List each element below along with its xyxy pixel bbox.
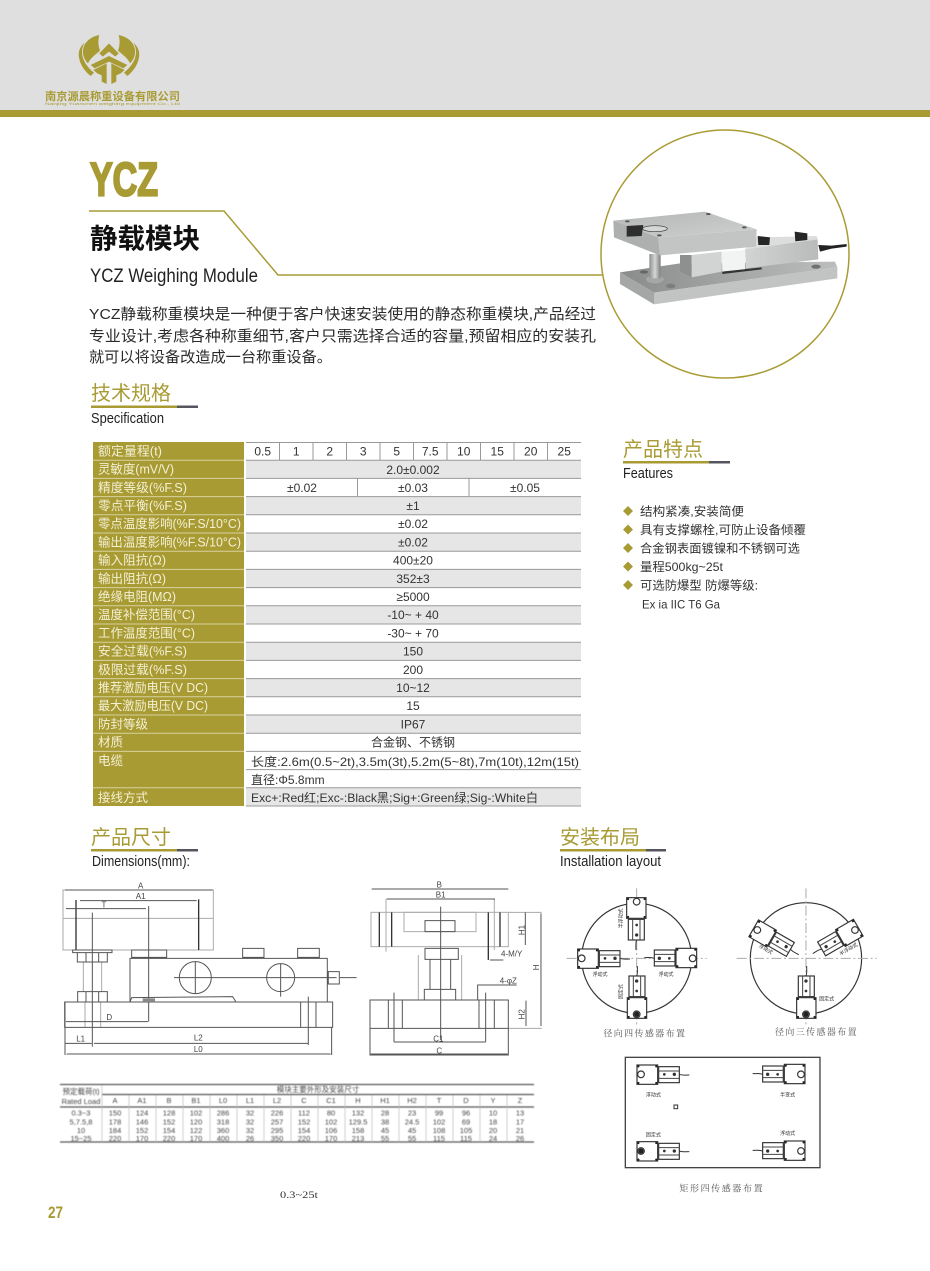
features list: 合金钢表面镀镍和不锈钢可选 bbox=[640, 540, 800, 556]
sensor labels: 半变式 bbox=[780, 1092, 795, 1099]
table values: 220 bbox=[163, 1134, 175, 1143]
table data values: IP67 bbox=[401, 717, 426, 731]
heading: dimensions bbox=[91, 826, 198, 870]
table label column: 绝缘电阻(MΩ) bbox=[98, 589, 176, 604]
table values: 17 bbox=[516, 1118, 524, 1126]
table values: 360 bbox=[217, 1126, 229, 1135]
heading: features: 产品特点 bbox=[623, 438, 703, 461]
intro text: YCZ静载称重模块是一种便于客户快速安装使用的静态称重模块,产品经过 bbox=[89, 306, 596, 323]
layout: radial four sensors bbox=[567, 888, 707, 1039]
table values: 69 bbox=[462, 1118, 470, 1126]
table data values: ±0.02 bbox=[287, 481, 317, 495]
table label column: 材质 bbox=[98, 736, 123, 750]
table values: 102 bbox=[325, 1118, 337, 1126]
table values: T bbox=[437, 1096, 442, 1105]
dimension labels: C bbox=[436, 1046, 442, 1055]
table values: 154 bbox=[298, 1126, 310, 1135]
table values: 122 bbox=[190, 1126, 202, 1135]
dimension labels: D bbox=[106, 1013, 112, 1022]
features list: 结构紧凑,安装简便 bbox=[640, 504, 744, 518]
table values: 102 bbox=[433, 1118, 445, 1126]
dimension labels: H1 bbox=[518, 924, 527, 935]
dimension labels: 4-φZ bbox=[500, 976, 517, 985]
table values: 178 bbox=[109, 1118, 121, 1126]
table data values: 15 bbox=[406, 699, 420, 713]
heading: features: Features bbox=[623, 465, 673, 482]
table values: 55 bbox=[381, 1134, 389, 1143]
heading: installation layout: 安装布局 bbox=[560, 826, 640, 849]
table values: 295 bbox=[271, 1126, 283, 1135]
product photo in circle bbox=[601, 130, 849, 378]
table values: 45 bbox=[381, 1126, 389, 1135]
table values: B1 bbox=[191, 1096, 201, 1105]
heading: features bbox=[623, 438, 730, 482]
sensor labels bbox=[758, 941, 859, 1003]
dimension drawing: end view bbox=[340, 880, 542, 1055]
table data values: -30~ + 70 bbox=[387, 626, 439, 640]
table values: 286 bbox=[217, 1108, 229, 1118]
table values: 132 bbox=[352, 1108, 364, 1118]
sensor labels: 浮动式 bbox=[758, 943, 774, 956]
table data values: 长度:2.6m(0.5~2t),3.5m(3t),5.2m(5~8t),7m(10t),12m(15t) bbox=[251, 754, 579, 769]
table values: 106 bbox=[325, 1126, 337, 1135]
table data values: ±0.03 bbox=[398, 481, 428, 495]
table values: 213 bbox=[352, 1134, 364, 1143]
caption: 矩形四传感器布置 bbox=[679, 1183, 763, 1194]
table values: 10 bbox=[489, 1108, 497, 1118]
table data values: -10~ + 40 bbox=[387, 608, 439, 622]
sensor labels: 浮动式 bbox=[659, 971, 673, 978]
table data values: ±0.02 bbox=[398, 517, 428, 531]
heading: specification bbox=[91, 382, 198, 427]
table data values: 7.5 bbox=[422, 444, 439, 458]
features list bbox=[623, 504, 806, 612]
table values: B bbox=[166, 1096, 172, 1105]
table label column: 额定量程(t) bbox=[98, 444, 162, 458]
features list: 量程500kg~25t bbox=[640, 559, 724, 574]
table values: 220 bbox=[109, 1134, 121, 1143]
dimension labels: A1 bbox=[136, 892, 146, 901]
range note: 0.3~25t bbox=[280, 1191, 318, 1201]
table values: 28 bbox=[381, 1108, 389, 1118]
table values: 220 bbox=[298, 1134, 310, 1143]
table data values: 200 bbox=[403, 663, 423, 677]
dimension labels: C1 bbox=[433, 1035, 444, 1044]
table label column: 输出阻抗(Ω) bbox=[98, 571, 166, 586]
intro text: 专业设计,考虑各种称重细节,客户只需选择合适的容量,预留相应的安装孔 bbox=[89, 327, 596, 345]
table values: 150 bbox=[109, 1108, 121, 1118]
table label column: 接线方式 bbox=[98, 790, 149, 805]
table values: 152 bbox=[136, 1126, 148, 1135]
dimension labels bbox=[76, 881, 203, 1054]
table values: 129.5 bbox=[349, 1118, 367, 1126]
table values: 152 bbox=[298, 1118, 310, 1126]
table values: 99 bbox=[435, 1108, 443, 1118]
table values: Z bbox=[518, 1096, 523, 1105]
features list: 可选防爆型 防爆等级: bbox=[640, 578, 758, 592]
table data values: 2.0±0.002 bbox=[386, 463, 440, 477]
table values: L1 bbox=[246, 1096, 254, 1105]
dimension labels: H bbox=[532, 964, 541, 970]
bullet diamonds bbox=[623, 506, 633, 590]
heading: dimensions: 产品尺寸 bbox=[91, 826, 171, 849]
table values: 45 bbox=[408, 1126, 416, 1135]
table label column: 工作温度范围(°C) bbox=[98, 625, 195, 640]
dimension labels: L1 bbox=[76, 1035, 86, 1044]
table values: 21 bbox=[516, 1126, 524, 1135]
table values: 124 bbox=[136, 1108, 148, 1118]
sensor labels bbox=[646, 1092, 795, 1139]
table data values: ≥5000 bbox=[396, 590, 430, 604]
table label column: 输入阻抗(Ω) bbox=[98, 553, 166, 568]
table values: 112 bbox=[298, 1108, 310, 1118]
table values: 15~25 bbox=[70, 1134, 92, 1143]
table values: L0 bbox=[219, 1096, 227, 1105]
table data values: 10 bbox=[457, 444, 471, 458]
table data values bbox=[251, 444, 579, 805]
table label column: 精度等级(%F.S) bbox=[98, 480, 187, 495]
dimension labels: 4-M/Y bbox=[501, 950, 523, 959]
dimensions table bbox=[60, 1084, 534, 1143]
dimension labels bbox=[433, 880, 541, 1055]
sensor labels: 浮动式 bbox=[780, 1130, 795, 1137]
table data values: 5 bbox=[393, 444, 400, 458]
caption: 径向三传感器布置 bbox=[775, 1026, 857, 1037]
table values: 257 bbox=[271, 1118, 283, 1126]
table label column: 最大激励电压(V DC) bbox=[98, 699, 208, 713]
table label column: 零点温度影响(%F.S/10°C) bbox=[98, 516, 241, 531]
heading: dimensions: Dimensions(mm): bbox=[92, 853, 190, 870]
table values: H1 bbox=[380, 1096, 390, 1105]
intro text: 就可以将设备改造成一台称重设备。 bbox=[89, 349, 332, 366]
table values: H2 bbox=[407, 1096, 417, 1105]
table values: 158 bbox=[352, 1126, 364, 1135]
table data values: 400±20 bbox=[393, 554, 433, 568]
table values: 400 bbox=[217, 1134, 229, 1143]
header band bbox=[0, 0, 930, 117]
table data values: 2 bbox=[326, 444, 333, 458]
table values: 318 bbox=[217, 1118, 229, 1126]
heading: english: YCZ Weighing Module bbox=[90, 266, 258, 287]
table data values: 10~12 bbox=[396, 681, 430, 695]
logo mark bbox=[79, 35, 139, 84]
table label column: 电缆 bbox=[98, 754, 124, 768]
table values: H bbox=[355, 1096, 361, 1105]
table label column: 零点平衡(%F.S) bbox=[98, 499, 187, 513]
table values: 10 bbox=[77, 1126, 85, 1135]
table values: 55 bbox=[408, 1134, 416, 1143]
table values: 105 bbox=[460, 1126, 472, 1135]
table values: 102 bbox=[190, 1108, 202, 1118]
table values: 120 bbox=[190, 1118, 202, 1126]
table values: 32 bbox=[246, 1126, 254, 1135]
table values: 26 bbox=[516, 1134, 524, 1143]
dimension labels: L0 bbox=[194, 1045, 203, 1054]
table data values: 3 bbox=[360, 444, 367, 458]
dimension labels: T bbox=[102, 900, 107, 909]
table label column: 输出温度影响(%F.S/10°C) bbox=[98, 534, 241, 549]
table values: 170 bbox=[136, 1134, 148, 1143]
table values: 152 bbox=[163, 1118, 175, 1126]
table values: 184 bbox=[109, 1126, 121, 1135]
sensor labels: 固定式 bbox=[819, 996, 834, 1003]
table label column: 防封等级 bbox=[98, 716, 149, 731]
table values: 108 bbox=[433, 1126, 445, 1135]
table values: 96 bbox=[462, 1108, 470, 1118]
table values: A1 bbox=[137, 1096, 147, 1105]
table values: C bbox=[301, 1096, 307, 1105]
title: YCZ: YCZ bbox=[90, 152, 158, 206]
table values: 18 bbox=[489, 1118, 497, 1126]
table values: 80 bbox=[327, 1108, 335, 1118]
table values: 226 bbox=[271, 1108, 283, 1118]
layout: radial three sensors bbox=[737, 888, 877, 1037]
table values: 5,7.5,8 bbox=[70, 1118, 92, 1126]
heading: chinese: 静载模块 bbox=[90, 223, 200, 254]
table values: 预定载荷(t) bbox=[62, 1086, 100, 1096]
dimension labels: L2 bbox=[194, 1034, 203, 1043]
table values: L2 bbox=[273, 1096, 281, 1105]
dimension labels: B1 bbox=[436, 890, 446, 899]
table data values: 15 bbox=[491, 444, 504, 458]
product module bbox=[613, 212, 847, 304]
table values: 模块主要外形及安装尺寸 bbox=[277, 1084, 360, 1094]
table label column: 推荐激励电压(V DC) bbox=[98, 681, 208, 695]
table data values: ±1 bbox=[406, 499, 420, 513]
table label column bbox=[93, 442, 244, 806]
table values: 350 bbox=[271, 1134, 283, 1143]
table values: 0.3~3 bbox=[72, 1108, 90, 1118]
table values bbox=[62, 1084, 524, 1143]
logo bbox=[45, 35, 180, 106]
table data rows background bbox=[246, 460, 581, 806]
table values: 128 bbox=[163, 1108, 175, 1118]
table values: 115 bbox=[460, 1134, 472, 1143]
table data values: Exc+:Red红;Exc-:Black黑;Sig+:Green绿;Sig-:White白 bbox=[251, 790, 538, 805]
table data values: 352±3 bbox=[396, 572, 430, 586]
sensor labels: 浮动式 bbox=[646, 1092, 661, 1099]
table values: 154 bbox=[163, 1126, 175, 1135]
company name: 南京源晨称重设备有限公司 bbox=[45, 89, 180, 103]
table data values: 1 bbox=[293, 444, 300, 458]
table data values: 0.5 bbox=[254, 444, 271, 458]
table values: 170 bbox=[190, 1134, 202, 1143]
table values: 38 bbox=[381, 1118, 389, 1126]
table values: 115 bbox=[433, 1134, 445, 1143]
heading: installation layout bbox=[560, 826, 666, 870]
company name english: Nanjing Yuanchen weighing equipment Co., Ltd bbox=[45, 101, 180, 106]
table label column: 温度补偿范围(°C) bbox=[98, 607, 195, 622]
table label column: 灵敏度(mV/V) bbox=[98, 462, 174, 476]
spec table bbox=[93, 442, 581, 806]
table data values: ±0.05 bbox=[510, 481, 540, 495]
sensor labels: 半浮动式 bbox=[838, 941, 859, 957]
features list: 具有支撑螺栓,可防止设备倾覆 bbox=[640, 522, 806, 537]
table values: D bbox=[463, 1096, 469, 1105]
dimension labels: B bbox=[437, 880, 442, 889]
sensor labels: 浮动式 bbox=[593, 971, 607, 978]
table values: 26 bbox=[246, 1134, 254, 1143]
table values: 23 bbox=[408, 1108, 416, 1118]
dimension labels: A bbox=[138, 881, 144, 890]
features list: Ex ia IIC T6 Ga bbox=[642, 598, 720, 612]
sensor labels: 固定式 bbox=[646, 1132, 661, 1139]
table values: A bbox=[112, 1096, 118, 1105]
layout: rectangular four sensors bbox=[625, 1057, 820, 1194]
table values: C1 bbox=[326, 1096, 336, 1105]
table values: Y bbox=[490, 1096, 496, 1105]
table data values: 合金钢、不锈钢 bbox=[371, 735, 455, 750]
sensor labels: 半浮动式 bbox=[617, 908, 624, 928]
table values: 20 bbox=[489, 1126, 497, 1135]
table label column: 极限过载(%F.S) bbox=[98, 663, 187, 677]
sensor labels bbox=[593, 908, 673, 999]
table values: 24 bbox=[489, 1134, 497, 1143]
table values: 146 bbox=[136, 1118, 148, 1126]
heading: specification: 技术规格 bbox=[91, 382, 171, 405]
table data values: ±0.02 bbox=[398, 535, 428, 549]
dimension drawing: side view bbox=[63, 881, 339, 1055]
table data values: 150 bbox=[403, 645, 423, 659]
heading: installation layout: Installation layout bbox=[560, 853, 662, 870]
table values: Rated Load bbox=[62, 1097, 100, 1106]
sensor labels: 固定式 bbox=[617, 984, 624, 999]
table values: 13 bbox=[516, 1108, 524, 1118]
table values: 32 bbox=[246, 1118, 254, 1126]
table data values: 直径:Φ5.8mm bbox=[251, 773, 325, 787]
dimension labels: H2 bbox=[518, 1009, 527, 1019]
table values: 170 bbox=[325, 1134, 337, 1143]
table data values: 25 bbox=[558, 444, 571, 458]
table data values: 20 bbox=[524, 444, 538, 458]
title leader line bbox=[89, 211, 603, 275]
heading: specification: Specification bbox=[91, 410, 164, 427]
page number: 27 bbox=[48, 1203, 63, 1222]
table label column: 安全过载(%F.S) bbox=[98, 644, 187, 659]
table values: 32 bbox=[246, 1108, 254, 1118]
table values: 24.5 bbox=[405, 1118, 419, 1126]
intro text bbox=[89, 306, 596, 366]
caption: 径向四传感器布置 bbox=[603, 1028, 685, 1039]
